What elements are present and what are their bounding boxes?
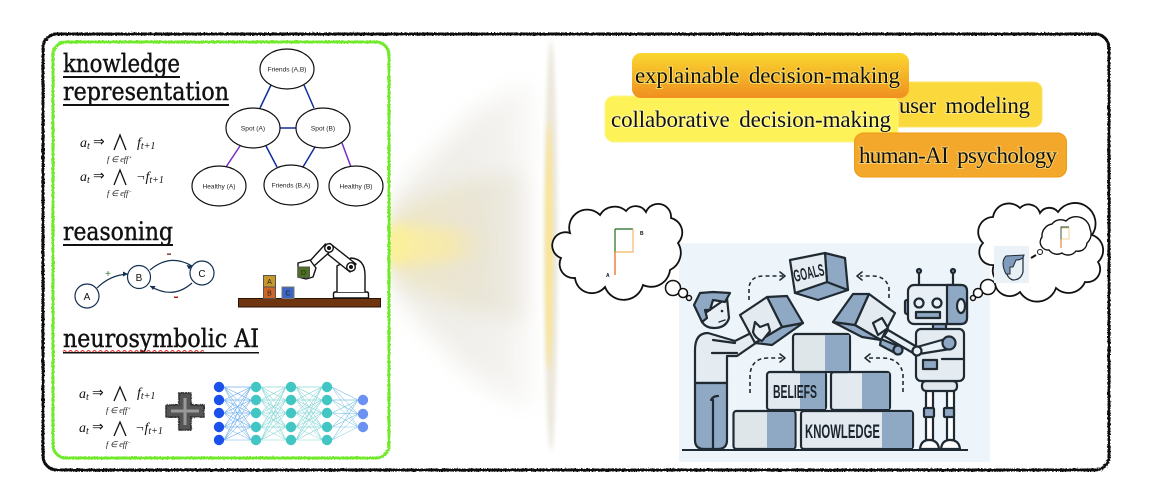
- block D: D: [301, 270, 306, 277]
- tag: user modeling: [888, 82, 1042, 127]
- robot arm: [298, 244, 368, 298]
- block A: [264, 276, 276, 287]
- formula: action effects repeated: t: [86, 392, 89, 403]
- block: knowledge: [801, 411, 913, 449]
- block: top: [793, 334, 850, 372]
- flag path diagram: A: [606, 273, 610, 279]
- formula: action effects: [80, 135, 164, 198]
- formula: action effects repeated: ⇒: [92, 420, 104, 435]
- tags: research topics: [605, 53, 1066, 177]
- tag: human-AI psychology: human-AI psychology: [859, 143, 1058, 168]
- graph: knowledge network: Friends (B,A): [272, 182, 310, 190]
- heading: knowledge representation: [63, 49, 229, 106]
- formula: action effects: ¬f: [136, 170, 149, 185]
- graph: knowledge network: Healthy (A): [203, 184, 235, 190]
- light beam from panel to lens: [384, 80, 530, 410]
- block: bottom left: [734, 411, 796, 449]
- tag: explainable decision-making: explainable decision-making: [635, 63, 900, 88]
- diagram: causal graph A B C: [75, 254, 214, 308]
- icon: plus: [166, 393, 204, 430]
- thought bubble: human: [552, 204, 692, 300]
- graph: knowledge network: Healthy (B): [340, 184, 372, 190]
- flag path diagram: [606, 229, 644, 279]
- cube: held by human: [740, 296, 803, 345]
- formula: action effects repeated: ⇒: [92, 386, 104, 401]
- heading: knowledge representation: knowledge: [63, 49, 180, 78]
- ground line: [682, 449, 968, 451]
- formula: action effects: ⇒: [93, 135, 105, 150]
- cube: goals: [790, 253, 848, 300]
- formula: action effects repeated: a: [79, 421, 86, 436]
- panel border: [53, 42, 389, 458]
- formula: action effects: ⇒: [93, 169, 105, 184]
- block: beliefs: [767, 372, 826, 410]
- tag: user modeling: user modeling: [899, 93, 1030, 118]
- tag: explainable decision-making: [632, 53, 909, 98]
- tag: collaborative decision-making: [605, 96, 898, 142]
- formula: action effects: f ∈ eff: [107, 155, 128, 164]
- illustration: human and robot building blocks: [679, 243, 990, 462]
- formula: action effects: a: [80, 170, 87, 185]
- diagram: causal graph A B C: A: [84, 292, 91, 303]
- panel: knowledge, reasoning, neurosymbolic: [53, 42, 389, 458]
- formula: action effects repeated: +: [127, 406, 131, 412]
- formula: action effects repeated: t+1: [148, 426, 163, 437]
- formula: action effects repeated: [79, 386, 163, 449]
- block B: [264, 287, 276, 298]
- graph: knowledge network: Spot (B): [311, 126, 335, 132]
- formula: action effects repeated: f: [137, 386, 141, 401]
- block: beliefs: BELIEFS: [773, 382, 817, 402]
- illustration background: [679, 243, 990, 462]
- formula: action effects: t: [87, 175, 90, 186]
- cube: goals: GOALS: [792, 260, 826, 286]
- formula: action effects repeated: f ∈ eff: [106, 406, 127, 415]
- lens: [544, 41, 558, 451]
- block C: [282, 287, 294, 298]
- graph: knowledge network: Friends (A,B): [268, 66, 306, 74]
- block C: C: [285, 290, 291, 298]
- figure: robot: [873, 269, 967, 449]
- bubble trail: [970, 280, 996, 300]
- formula: action effects: −: [128, 189, 132, 195]
- formula: action effects: t+1: [149, 175, 164, 186]
- diagram: causal graph A B C: B: [136, 273, 143, 284]
- heading: neurosymbolic AI: neurosymbolic AI: [63, 324, 259, 353]
- block: knowledge: KNOWLEDGE: [805, 422, 880, 443]
- formula: action effects repeated: f ∈ eff: [106, 440, 127, 449]
- formula: action effects repeated: t+1: [141, 391, 155, 402]
- formula: action effects: f: [137, 136, 141, 151]
- graph: knowledge network: [192, 49, 383, 206]
- block A: A: [267, 279, 272, 286]
- arrows: dashed goal arrows: [749, 272, 903, 393]
- block D: [298, 267, 310, 278]
- formula: action effects: t: [87, 141, 90, 152]
- thought bubble: robot: [970, 203, 1103, 302]
- cube: held by robot: [833, 294, 895, 340]
- formula: action effects repeated: a: [79, 387, 86, 402]
- formula: action effects repeated: t: [86, 426, 89, 437]
- icon: human face thought: [994, 246, 1029, 283]
- diagram: causal graph A B C: C: [198, 269, 206, 280]
- table: [238, 298, 380, 307]
- block B: B: [267, 290, 272, 298]
- block: middle right: [831, 372, 890, 410]
- formula: action effects: +: [128, 155, 132, 161]
- formula: action effects: t+1: [141, 141, 155, 152]
- inner thought cloud: [1031, 217, 1091, 258]
- tag: human-AI psychology: [854, 133, 1066, 177]
- diagram: causal graph A B C: +: [105, 269, 111, 280]
- formula: action effects repeated: ¬f: [135, 421, 148, 436]
- graph: knowledge network: Spot (A): [241, 126, 265, 132]
- figure: human: [694, 292, 763, 449]
- flag path diagram: B: [640, 231, 644, 237]
- heading: reasoning: reasoning: [63, 217, 173, 246]
- formula: action effects: f ∈ eff: [107, 189, 128, 198]
- formula: action effects repeated: −: [127, 440, 131, 446]
- heading: knowledge representation: representation: [63, 77, 229, 106]
- bubble trail: [666, 280, 692, 300]
- diagram: robot arm stacking blocks: [238, 244, 380, 307]
- chart: neural network: [214, 382, 368, 445]
- formula: action effects: a: [80, 136, 87, 151]
- tag: collaborative decision-making: collaborative decision-making: [611, 107, 892, 132]
